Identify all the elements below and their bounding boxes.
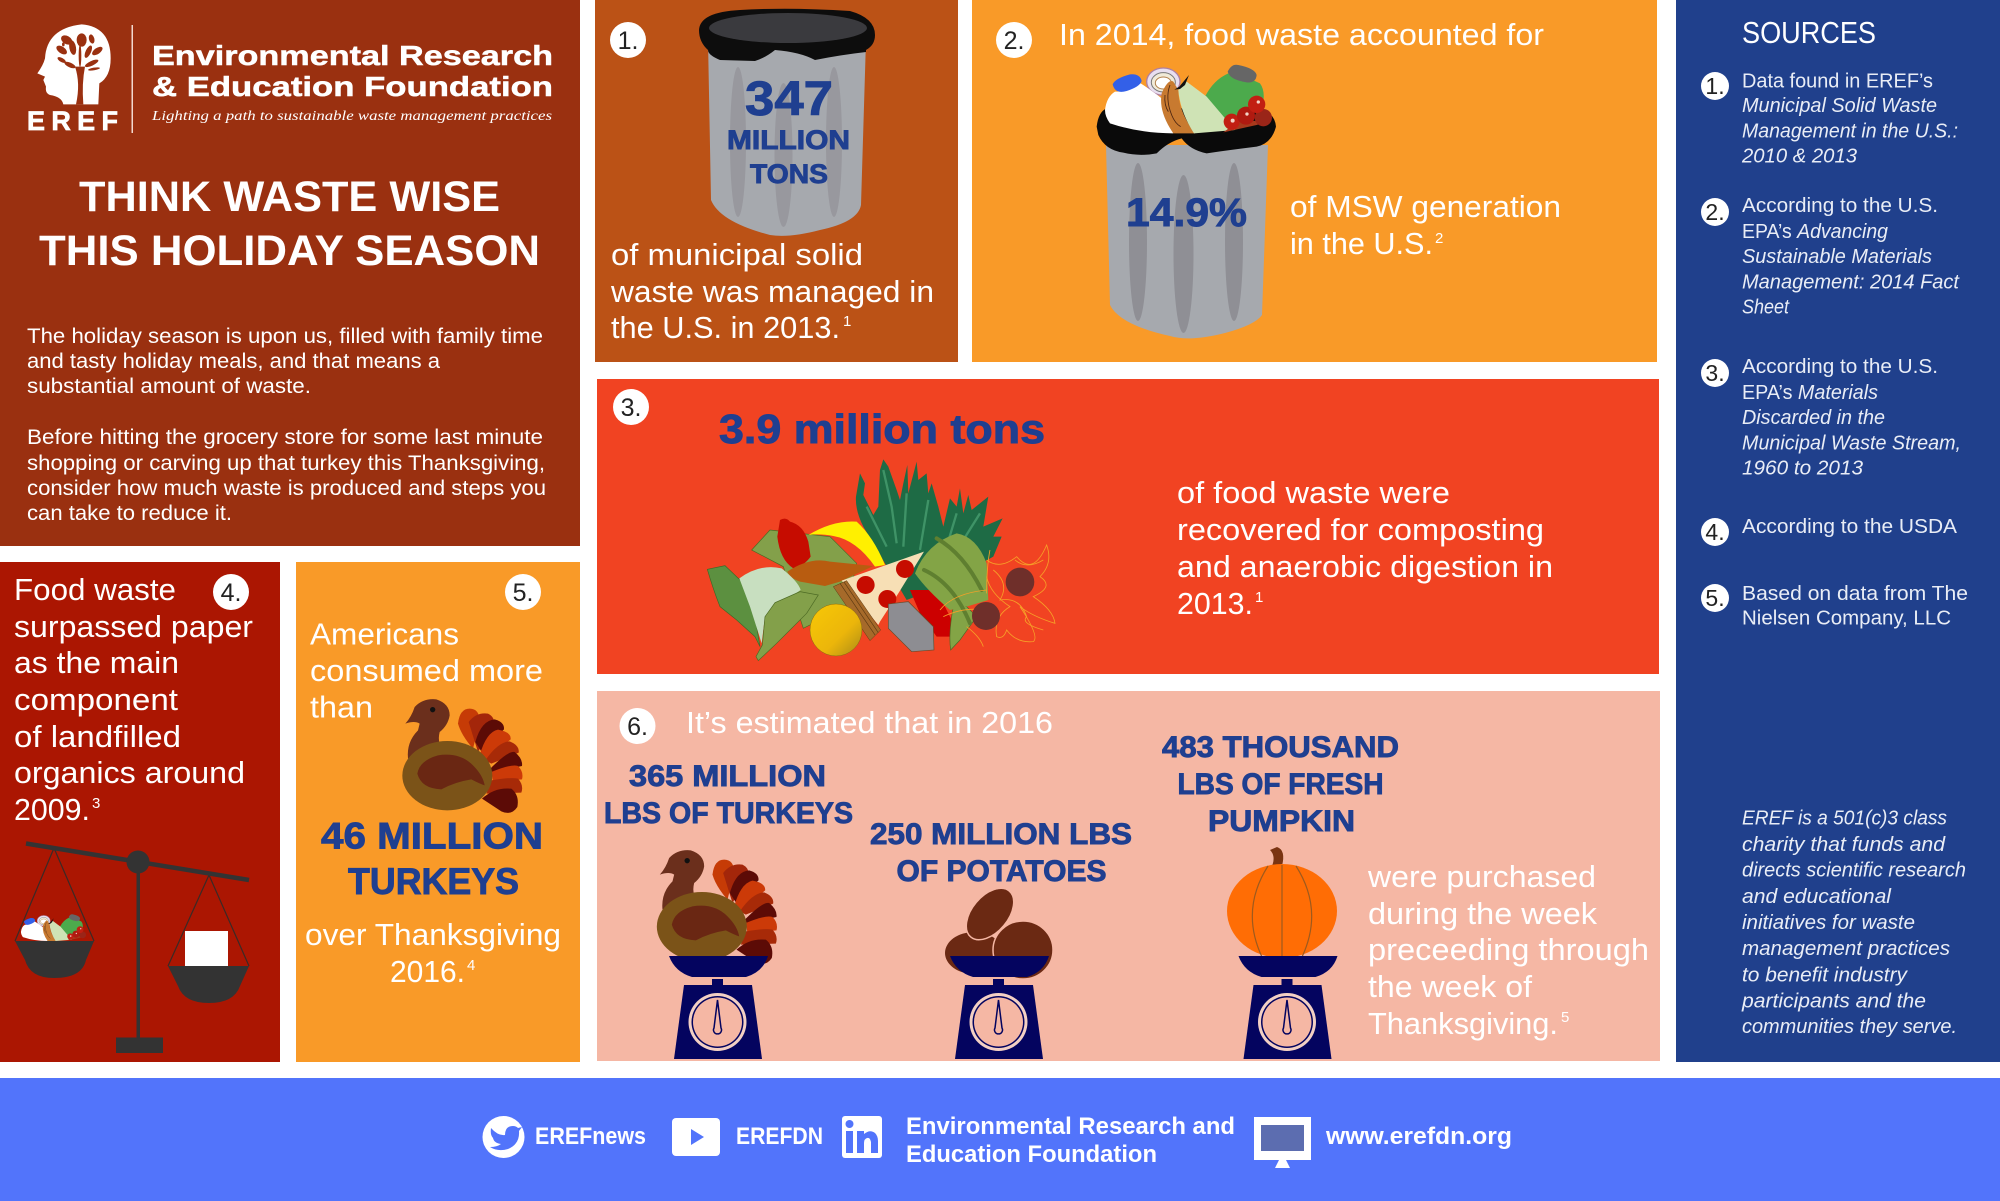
source 3: According to the U.S. [1742, 355, 1938, 378]
text: Americans consumed more than: than [310, 690, 373, 724]
link: linkedin name: Education Foundation [906, 1141, 1157, 1168]
text: recovered for composting: recovered for composting [1177, 512, 1544, 547]
text: food waste surpassed paper: as the main [14, 645, 179, 680]
tagline: Lighting a path to sustainable waste management practices [151, 109, 553, 124]
stat: 250 million lbs of potatoes: OF POTATOES [896, 855, 1106, 888]
icon: trash can full of food [1097, 65, 1276, 338]
stat: 483 thousand lbs of fresh pumpkin: PUMPKIN [1208, 805, 1355, 838]
text: Americans consumed more than: consumed more [310, 653, 543, 688]
text: about EREF [1741, 806, 1966, 1038]
number badge 3: 3. [621, 394, 641, 422]
icon: twitter [482, 1116, 524, 1158]
introduction text: can take to reduce it. [27, 502, 232, 525]
source 1 [1701, 70, 1958, 168]
link: linkedin name [906, 1113, 1235, 1168]
footer bar [0, 1078, 2000, 1201]
text: about EREF: charity that funds and [1742, 833, 1946, 856]
source 3: 3. [1705, 360, 1725, 386]
stat: 347 million tons: TONS [750, 159, 828, 189]
number badge 2 [996, 22, 1032, 58]
text: food waste surpassed paper: component [14, 682, 178, 717]
stat: 483 thousand lbs of fresh pumpkin: 483 THOUSAND [1162, 731, 1399, 764]
text: about EREF: EREF is a 501(c)3 class [1742, 806, 1947, 829]
source 2: 2. [1705, 199, 1725, 225]
source 1: Management in the U.S.: [1742, 120, 1958, 143]
text: over Thanksgiving 2016 [305, 917, 561, 989]
text: about EREF: directs scientific research [1742, 859, 1966, 882]
text: about EREF: participants and the [1741, 989, 1926, 1012]
link: twitter handle: EREFnews [535, 1123, 646, 1150]
text: were purchased: Thanksgiving. [1368, 1006, 1558, 1041]
text: of MSW generation: 2 [1435, 230, 1443, 247]
text: of MSW generation: of MSW generation [1290, 189, 1561, 224]
organisation name: Environmental Research [152, 40, 553, 71]
source 1: Data found in EREF’s [1742, 70, 1933, 92]
number badge 4 [213, 574, 249, 610]
stat: 46 million turkeys [321, 816, 543, 902]
link: youtube channel: EREFDN [736, 1123, 823, 1150]
source 5: 5. [1705, 585, 1725, 611]
title [39, 173, 540, 275]
text: were purchased [1367, 859, 1649, 1041]
stat: 365 million lbs of turkeys: 365 MILLION [629, 760, 826, 793]
source 1: 2010 & 2013 [1741, 144, 1858, 168]
stat: 483 thousand lbs of fresh pumpkin [1162, 731, 1399, 838]
text: food waste surpassed paper: organics around [14, 755, 245, 790]
source 2: Sustainable Materials [1742, 245, 1932, 268]
stat: 483 thousand lbs of fresh pumpkin: LBS OF FRESH [1178, 768, 1384, 801]
number badge 6: 6. [627, 713, 648, 741]
text: were purchased: the week of [1368, 969, 1532, 1004]
logo: EREF head and tree: EREF [27, 106, 118, 136]
source 2: EPA’s Advancing [1742, 220, 1889, 243]
source 3: Discarded in the [1742, 406, 1885, 429]
text: recovered for composting: 2013. [1177, 586, 1253, 621]
text: Americans consumed more than [310, 616, 543, 724]
text: over Thanksgiving 2016: 2016. [390, 954, 465, 989]
text: managed in 2013: of municipal solid [611, 237, 863, 272]
source 2: According to the U.S. [1742, 194, 1938, 217]
stat: 46 million turkeys: 46 MILLION [321, 816, 543, 856]
text: over Thanksgiving 2016: over Thanksgiving [305, 917, 561, 952]
source 3: EPA’s Materials [1742, 381, 1878, 404]
text: food waste surpassed paper: surpassed paper [14, 609, 253, 644]
number badge 2: 2. [1004, 27, 1024, 55]
text: food waste surpassed paper: Food waste [14, 572, 176, 607]
heading: It’s estimated that in 2016 [686, 705, 1053, 740]
text: managed in 2013 [610, 237, 934, 345]
source 3 [1701, 355, 1961, 480]
text: over Thanksgiving 2016: 4 [467, 957, 475, 974]
panel 6: purchases in 2016 [597, 691, 1660, 1061]
source 1: 1. [1705, 73, 1725, 99]
text: recovered for composting: of food waste were [1177, 475, 1450, 510]
source 5: Based on data from The [1742, 582, 1968, 605]
text: food waste surpassed paper: of landfilled [14, 719, 181, 754]
stat: 347 million tons [727, 73, 850, 189]
link: website: www.erefdn.org [1325, 1123, 1512, 1150]
source 4: According to the USDA [1742, 515, 1957, 538]
text: managed in 2013: the U.S. in 2013. [611, 310, 840, 345]
number badge 5 [505, 574, 541, 610]
source 2: Sheet [1742, 296, 1790, 319]
panel: sources [1676, 0, 2000, 1062]
number badge 6 [620, 708, 656, 744]
introduction text: substantial amount of waste. [27, 375, 311, 398]
text: food waste surpassed paper: 2009. [14, 792, 90, 827]
illustration: pile of food waste [707, 459, 1055, 661]
text: food waste surpassed paper [14, 572, 253, 827]
heading: sources: SOURCES [1742, 15, 1876, 50]
source 1: Municipal Solid Waste [1742, 94, 1937, 117]
source 4: 4. [1705, 519, 1725, 545]
text: about EREF: communities they serve. [1742, 1015, 1957, 1038]
number badge 4: 4. [221, 579, 241, 607]
illustration: balance scale [15, 844, 249, 1053]
introduction text: shopping or carving up that turkey this Thanksgiving, [27, 452, 545, 475]
organisation name [152, 40, 553, 102]
introduction text [27, 325, 546, 525]
source 3: Municipal Waste Stream, [1742, 432, 1961, 455]
logo: EREF head and tree [27, 24, 133, 136]
text: were purchased: were purchased [1367, 859, 1596, 894]
number badge 5: 5. [513, 579, 533, 607]
panel 4: landfilled organics [0, 562, 280, 1062]
stat: 365 million lbs of turkeys [604, 760, 853, 830]
source 2: Management: 2014 Fact [1742, 270, 1960, 293]
text: about EREF: initiatives for waste [1742, 911, 1915, 934]
text: about EREF: and educational [1742, 885, 1892, 908]
text: managed in 2013: 1 [843, 313, 851, 330]
text: recovered for composting: 1 [1255, 589, 1263, 606]
stat: 347 million tons: 347 [745, 73, 833, 126]
introduction text: Before hitting the grocery store for some last minute [27, 426, 543, 449]
text: were purchased: preceeding through [1368, 932, 1649, 967]
source 2 [1701, 194, 1960, 319]
text: were purchased: during the week [1368, 896, 1598, 931]
title: THINK WASTE WISE [79, 173, 500, 221]
text: recovered for composting [1177, 475, 1553, 621]
icon: turkey on scale [657, 850, 777, 1059]
panel 3: composting [597, 379, 1659, 674]
icon: pumpkin on scale [1227, 847, 1338, 1059]
panel 1: municipal solid waste [595, 0, 958, 362]
text: recovered for composting: and anaerobic digestion in [1177, 549, 1553, 584]
text: of MSW generation: in the U.S. [1290, 226, 1433, 261]
number badge 1: 1. [618, 27, 638, 55]
link: linkedin name: Environmental Research and [906, 1113, 1235, 1140]
number badge 1 [610, 22, 646, 58]
text: Americans consumed more than: Americans [310, 616, 459, 652]
text: managed in 2013: waste was managed in [610, 274, 934, 309]
stat: 250 million lbs of potatoes [870, 818, 1132, 888]
text: food waste surpassed paper: 3 [92, 795, 100, 812]
text: of MSW generation [1290, 189, 1561, 261]
organisation name: & Education Foundation [152, 71, 553, 102]
icon: turkey [402, 699, 522, 813]
icon: youtube [672, 1118, 720, 1156]
introduction text: The holiday season is upon us, filled with family time [27, 325, 543, 348]
source 5 [1701, 582, 1968, 630]
title: THIS HOLIDAY SEASON [39, 227, 540, 275]
source 3: 1960 to 2013 [1742, 457, 1864, 480]
icon: monitor [1254, 1117, 1311, 1168]
panel 2: food waste share [972, 0, 1657, 362]
stat: 46 million turkeys: TURKEYS [348, 861, 519, 902]
panel: header and introduction [0, 0, 580, 546]
icon: linkedin [842, 1116, 882, 1158]
text: about EREF: management practices [1742, 937, 1950, 960]
stat: 347 million tons: MILLION [727, 125, 850, 155]
icon: potatoes on scale [945, 879, 1053, 1059]
stat: 250 million lbs of potatoes: 250 MILLION LBS [870, 818, 1132, 851]
source 4 [1701, 515, 1957, 546]
text: about EREF: to benefit industry [1742, 964, 1909, 986]
number badge 3 [613, 389, 649, 425]
introduction text: and tasty holiday meals, and that means a [27, 350, 440, 373]
stat: 14.9%: 14.9% [1126, 191, 1247, 235]
stat: 3.9 million tons: 3.9 million tons [719, 406, 1045, 452]
text: were purchased: 5 [1561, 1009, 1569, 1026]
panel 5: turkeys consumed [296, 562, 580, 1062]
heading: In 2014, food waste accounted for [1059, 17, 1544, 52]
introduction text: consider how much waste is produced and steps you [27, 477, 546, 500]
icon: trash can with lid [699, 9, 875, 236]
source 5: Nielsen Company, LLC [1742, 607, 1951, 630]
stat: 365 million lbs of turkeys: LBS OF TURKEYS [604, 797, 853, 830]
